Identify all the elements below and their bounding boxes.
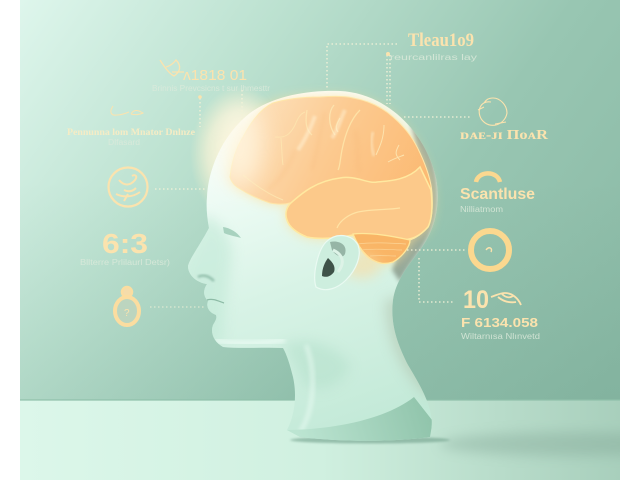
- label: top center heading: Tleau1o9: [408, 30, 474, 51]
- background wall: [20, 0, 620, 400]
- cerebellum: [353, 233, 410, 264]
- eye: [223, 227, 241, 238]
- brain left fade: [218, 103, 262, 187]
- temporal lobe: [286, 167, 432, 240]
- stat: 6:3: Bllterre Prlilaurl Detsr): [80, 258, 170, 267]
- label: Scantluse: Nilliatmom: [460, 205, 503, 214]
- head and neck bust: [180, 91, 440, 441]
- icon: ring gauge: [471, 231, 509, 269]
- label: top left stat: [152, 60, 270, 93]
- label: Scantluse: [460, 186, 535, 214]
- sulci lines: [243, 105, 406, 256]
- ear: [315, 236, 380, 290]
- stat: 6:3: [80, 228, 170, 267]
- label: top left stat: ʌ1818 01: [183, 67, 247, 84]
- label: left upper block: Pennunna lom Mnator Dnlnze: [67, 128, 195, 138]
- connector lines: [150, 44, 470, 307]
- brain glow halo: [190, 87, 290, 223]
- icon: circular emblem: [108, 168, 148, 206]
- icon: top right face outline: [478, 98, 507, 125]
- label: Scantluse: Scantluse: [460, 186, 535, 203]
- label: top right text: ᴅᴀᴇ-ᴊɪ ΠᴏᴀR: [460, 128, 549, 143]
- stat: 10: [461, 286, 540, 341]
- stat: 10: F 6134.058: [461, 315, 538, 330]
- stat: 6:3: 6:3: [102, 228, 148, 259]
- label: top center heading: [390, 30, 477, 62]
- bust shadow: [290, 436, 450, 444]
- lips: [207, 299, 224, 303]
- brain: [218, 96, 432, 264]
- label: top center heading: reurcanlilras lay: [390, 53, 477, 62]
- floor: [20, 395, 640, 480]
- icon: lock: ?: [124, 308, 130, 319]
- label: left upper block: [67, 106, 195, 147]
- stat: 10: Wiltarnısa Nlınvetd: [461, 332, 540, 341]
- label: top left stat: Brinnis Prevcsicns t sur lhmesttr: [152, 84, 270, 93]
- icon: arc: [476, 173, 500, 182]
- label: left upper block: Dlfasard: [108, 138, 140, 147]
- nostril: [198, 276, 214, 281]
- icon: lock: [115, 287, 139, 325]
- stat: 10: 10: [463, 286, 489, 314]
